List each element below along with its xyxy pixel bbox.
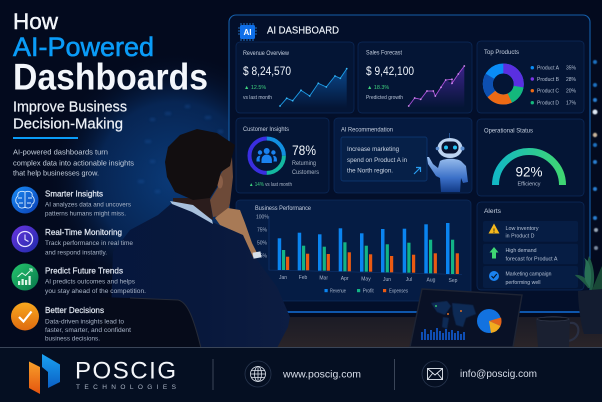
title: AI-Powered: AI-Powered	[13, 32, 154, 62]
month labels: May	[361, 276, 371, 282]
gauge arc	[496, 152, 562, 185]
icon: arrow	[414, 168, 420, 174]
donut legend: Product C	[537, 89, 559, 95]
top products heading: Top Products	[484, 49, 519, 56]
panel: sales forecast	[358, 42, 472, 113]
icon: AI chip: AI	[244, 28, 252, 37]
y axis labels: 100%	[256, 215, 269, 221]
chair edge	[130, 298, 201, 348]
ear	[217, 176, 223, 188]
benefit copy line two: patterns humans might miss.	[45, 210, 126, 218]
customer growth: ▲ 14% vs last month	[249, 182, 292, 188]
panel: operational status	[477, 119, 584, 196]
intro paragraph: complex data into actionable insights	[13, 160, 135, 168]
sales forecast line chart	[408, 65, 465, 108]
footer background	[0, 347, 602, 402]
laptop world map	[431, 301, 476, 329]
donut legend: 35%	[566, 66, 576, 72]
shirt collar	[170, 201, 213, 224]
panel: revenue overview	[236, 42, 354, 113]
benefit copy: AI predicts outcomes and helps	[45, 278, 136, 286]
business performance heading: Business Performance	[255, 205, 311, 212]
month labels: Sep	[449, 278, 458, 284]
y axis labels: 75%	[257, 228, 268, 234]
intro paragraph: AI-powered dashboards turn	[13, 150, 108, 156]
hair	[165, 129, 235, 200]
alert: low inventory: !	[493, 229, 495, 235]
donut chart	[488, 68, 519, 100]
screen frame	[229, 15, 590, 312]
panel: alerts	[477, 202, 584, 290]
brand tagline: TECHNOLOGIES	[76, 384, 177, 391]
donut legend: 28%	[566, 77, 576, 83]
customer heading: Customer Insights	[243, 126, 289, 133]
icon: Poscig logo	[29, 354, 60, 394]
icon: plant	[575, 256, 602, 334]
chart legend	[324, 288, 408, 294]
alert: marketing campaign	[483, 266, 578, 288]
panel: business performance	[236, 200, 471, 301]
recommendation text: the North region.	[347, 167, 393, 174]
benefit copy: Data-driven insights lead to	[45, 318, 124, 326]
revenue line chart	[279, 68, 348, 108]
gauge value: 92%	[515, 164, 543, 180]
footer divider	[394, 359, 395, 390]
alert: marketing campaign: Marketing campaign	[506, 272, 552, 278]
benefit: smarter insights	[12, 186, 132, 218]
gauge label: Efficiency	[518, 182, 541, 188]
benefit: predict future trends	[12, 264, 146, 295]
dashboard title: AI DASHBOARD	[267, 26, 339, 36]
footer divider	[212, 359, 214, 390]
laptop map markers	[435, 305, 462, 315]
donut legend: 20%	[566, 89, 576, 95]
benefit copy: Track performance in real time	[45, 240, 133, 247]
y axis labels: 50%	[257, 241, 268, 247]
recommendation heading: AI Recommendation	[341, 126, 394, 133]
icon: mail	[422, 361, 448, 387]
alert: high demand: High demand	[506, 248, 536, 254]
subtitle line two: Decision-Making	[13, 116, 123, 132]
donut legend: Product A	[537, 66, 559, 72]
chart legend: Revenue	[330, 288, 346, 294]
icon: check	[11, 302, 39, 330]
y axis labels	[256, 215, 269, 260]
y axis labels: 25%	[257, 254, 268, 260]
icon: robot	[427, 133, 468, 192]
donut legend: 17%	[566, 101, 576, 107]
face	[210, 157, 233, 217]
profit bars	[282, 240, 454, 274]
title: Dashboards: Dashboards	[13, 56, 208, 98]
footer	[0, 347, 602, 402]
laptop pie chart	[477, 309, 502, 333]
sales growth: ▲ 18.3%	[367, 85, 389, 91]
subtitle line one: Improve Business	[13, 100, 127, 116]
background data dots	[138, 105, 229, 193]
expenses bars	[286, 252, 459, 274]
chair	[100, 297, 201, 348]
title: How: How	[13, 9, 58, 34]
month labels: Jul	[406, 277, 412, 283]
month labels: Apr	[341, 276, 349, 282]
donut legend: Product B	[537, 77, 559, 83]
sales note: Predicted growth	[366, 95, 403, 101]
website: www.poscig.com	[282, 370, 361, 380]
alert: low inventory: in Product D	[506, 234, 535, 240]
bar chart	[256, 215, 462, 284]
sales value: $ 9,42,100	[366, 66, 414, 78]
recommendation box	[341, 137, 427, 181]
revenue growth: ▲ 12.5%	[244, 85, 266, 91]
ring chart	[250, 138, 284, 173]
desk	[225, 317, 602, 348]
recommendation text: Increase marketing	[347, 146, 399, 153]
donut legend	[531, 66, 576, 107]
panel: AI dashboard screen	[229, 15, 590, 312]
email: info@poscig.com	[460, 369, 537, 380]
alert: low inventory	[483, 221, 578, 242]
revenue heading: Revenue Overview	[243, 50, 289, 57]
glow under screen	[229, 311, 590, 313]
icon: customers	[256, 148, 277, 163]
revenue note: vs last month	[243, 95, 272, 101]
icon: globe	[245, 361, 271, 387]
month labels: Jan	[279, 275, 287, 281]
month labels	[279, 275, 458, 284]
sales heading: Sales Forecast	[366, 50, 402, 56]
panel: customer insights	[236, 118, 329, 193]
revenue value: $ 8,24,570	[243, 66, 291, 78]
icon: growth chart	[12, 264, 38, 290]
customer stat label line two: Customers	[292, 170, 319, 176]
recommendation text	[347, 146, 407, 174]
donut legend: Product D	[537, 101, 559, 107]
alert: marketing campaign: performing well	[506, 280, 540, 286]
month labels: Aug	[427, 278, 436, 284]
benefit copy: AI analyzes data and uncovers	[45, 202, 132, 208]
alert: high demand	[483, 244, 578, 264]
benefit copy line two: faster, smarter, and confident	[45, 327, 131, 334]
benefit heading: Better Decisions	[45, 305, 104, 315]
title block	[13, 9, 208, 139]
right-edge data lights	[592, 60, 598, 250]
benefit: real-time monitoring	[12, 226, 133, 256]
person	[100, 129, 290, 348]
alert: low inventory: Low inventory	[506, 226, 539, 232]
icon: brain	[12, 186, 38, 214]
brand name: POSCIG	[75, 358, 176, 384]
laptop bar chart	[421, 328, 465, 340]
panel: top products	[477, 41, 584, 113]
benefit copy line three: business decisions.	[45, 336, 100, 342]
intro paragraph	[13, 150, 135, 178]
recommendation text: spend on Product A in	[347, 157, 407, 164]
benefit copy line two: you stay ahead of the competition.	[45, 288, 146, 295]
alert: high demand: forecast for Product A	[506, 256, 558, 262]
month labels: Feb	[299, 275, 308, 281]
icon: coffee mug	[536, 316, 578, 347]
header: chip icon and title	[238, 23, 339, 41]
benefit: better decisions	[11, 302, 131, 342]
month labels: Jun	[383, 277, 391, 283]
alerts heading: Alerts	[484, 208, 501, 215]
chart legend: Profit	[363, 288, 374, 294]
customer stat label: Returning	[292, 161, 316, 167]
benefit copy line two: and respond instantly.	[45, 250, 107, 256]
suit jacket	[110, 203, 290, 348]
icon: clock	[12, 226, 38, 252]
benefit heading: Predict Future Trends	[45, 266, 123, 276]
panel: AI recommendation	[334, 118, 472, 193]
hand	[215, 208, 258, 257]
benefit heading: Real-Time Monitoring	[45, 227, 122, 237]
revenue bars	[278, 223, 450, 274]
customer stat: 78%	[292, 142, 316, 158]
month labels: Mar	[319, 276, 328, 282]
benefit heading: Smarter Insights	[45, 188, 103, 198]
laptop	[410, 289, 522, 347]
neck	[173, 198, 213, 220]
operational heading: Operational Status	[484, 128, 533, 134]
title underline	[13, 137, 78, 139]
shirt cuff	[253, 251, 261, 259]
intro paragraph: that help businesses grow.	[13, 170, 99, 178]
chart legend: Expenses	[389, 288, 408, 294]
